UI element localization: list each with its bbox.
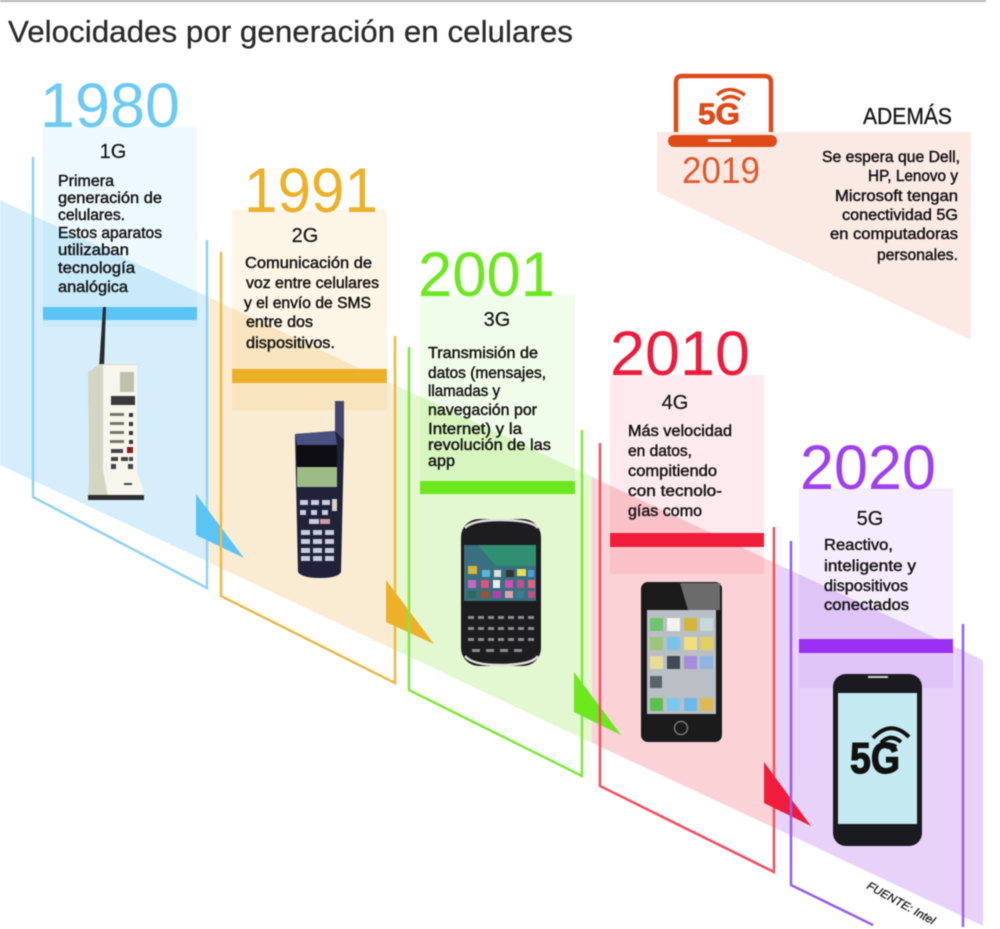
frame line [33, 157, 207, 588]
year 2019: 2019 [682, 150, 760, 191]
phone: touch smartphone [641, 582, 722, 742]
title: Velocidades por generación en celulares [8, 14, 573, 49]
year: 2020 [800, 433, 936, 503]
description [58, 173, 162, 296]
heading: además: ADEMÁS [863, 103, 952, 129]
description: en datos, [628, 443, 692, 460]
description: analógica [58, 279, 128, 296]
icon: 5G signal: 5G [850, 734, 900, 783]
generation label: 1G [100, 141, 126, 163]
frame line [600, 443, 774, 872]
generation label: 2G [292, 225, 318, 247]
description: Más velocidad [628, 423, 732, 440]
description: con tecnolo- [628, 483, 722, 500]
description: conectados [824, 597, 909, 614]
panel: 1980 1G [33, 71, 244, 588]
phone: smartphone with keyboard [461, 519, 541, 666]
year: 1991 [244, 156, 378, 226]
description: compitiendo [628, 463, 717, 480]
description [244, 255, 379, 352]
text block: además: Se espera que Dell, [822, 149, 960, 166]
frame line [791, 541, 873, 925]
description: entre dos [246, 314, 313, 331]
description: app [428, 453, 455, 470]
description: llamadas y [428, 383, 500, 400]
description: Comunicación de [245, 255, 372, 272]
description: Primera [58, 173, 114, 190]
arrow marker [764, 762, 811, 826]
description: navegación por [428, 402, 537, 419]
phone: 5G smartphone [833, 674, 922, 846]
generation label: 4G [662, 392, 688, 414]
description: generación de [58, 190, 162, 207]
icon: 5G laptop: 5G [698, 98, 740, 131]
description: celulares. [58, 207, 125, 224]
description: y el envío de SMS [244, 295, 371, 312]
panel: 2020 5G [791, 433, 963, 928]
description [428, 345, 551, 470]
description: inteligente y [824, 558, 916, 575]
description: gías como [628, 503, 702, 520]
panel: 2001 3G [409, 240, 621, 776]
text block: además [822, 149, 960, 264]
arrow marker [386, 580, 434, 644]
phone: 2G handset [295, 401, 344, 578]
panel: 2019 además [657, 76, 971, 340]
generation label: 5G [857, 508, 883, 530]
icon: 5G laptop [668, 76, 777, 147]
text block: además: en computadoras [830, 226, 958, 243]
arrow marker [196, 494, 244, 558]
year: 2010 [610, 319, 750, 389]
description [824, 537, 916, 614]
generation label: 3G [484, 309, 510, 331]
description: utilizaban [58, 242, 129, 259]
text block: además: conectividad 5G [842, 207, 958, 224]
text block: además: Microsoft tengan [835, 188, 958, 205]
description: revolución de las [428, 437, 551, 454]
description [628, 423, 732, 520]
description: Transmisión de [428, 345, 538, 362]
description: Estos aparatos [58, 225, 162, 242]
panel: 2010 4G [600, 319, 811, 872]
source: FUENTE: Intel [865, 880, 937, 928]
year: 1980 [40, 71, 180, 141]
text block: además: HP, Lenovo y [868, 168, 958, 185]
description: Reactivo, [824, 537, 893, 554]
description: voz entre celulares [246, 275, 379, 292]
phone: brick [88, 307, 144, 500]
arrow marker [574, 672, 621, 735]
description: dispositivos. [246, 335, 335, 352]
description: datos (mensajes, [428, 365, 546, 382]
text block: además: personales. [877, 247, 958, 264]
year: 2001 [418, 240, 555, 310]
description: Internet) y la [428, 421, 522, 438]
diagonal timeline band [0, 200, 983, 926]
frame line [409, 347, 582, 776]
panel: 1991 2G [221, 156, 434, 683]
frame line [221, 252, 395, 683]
description: tecnología [58, 260, 135, 277]
description: dispositivos [824, 578, 908, 595]
